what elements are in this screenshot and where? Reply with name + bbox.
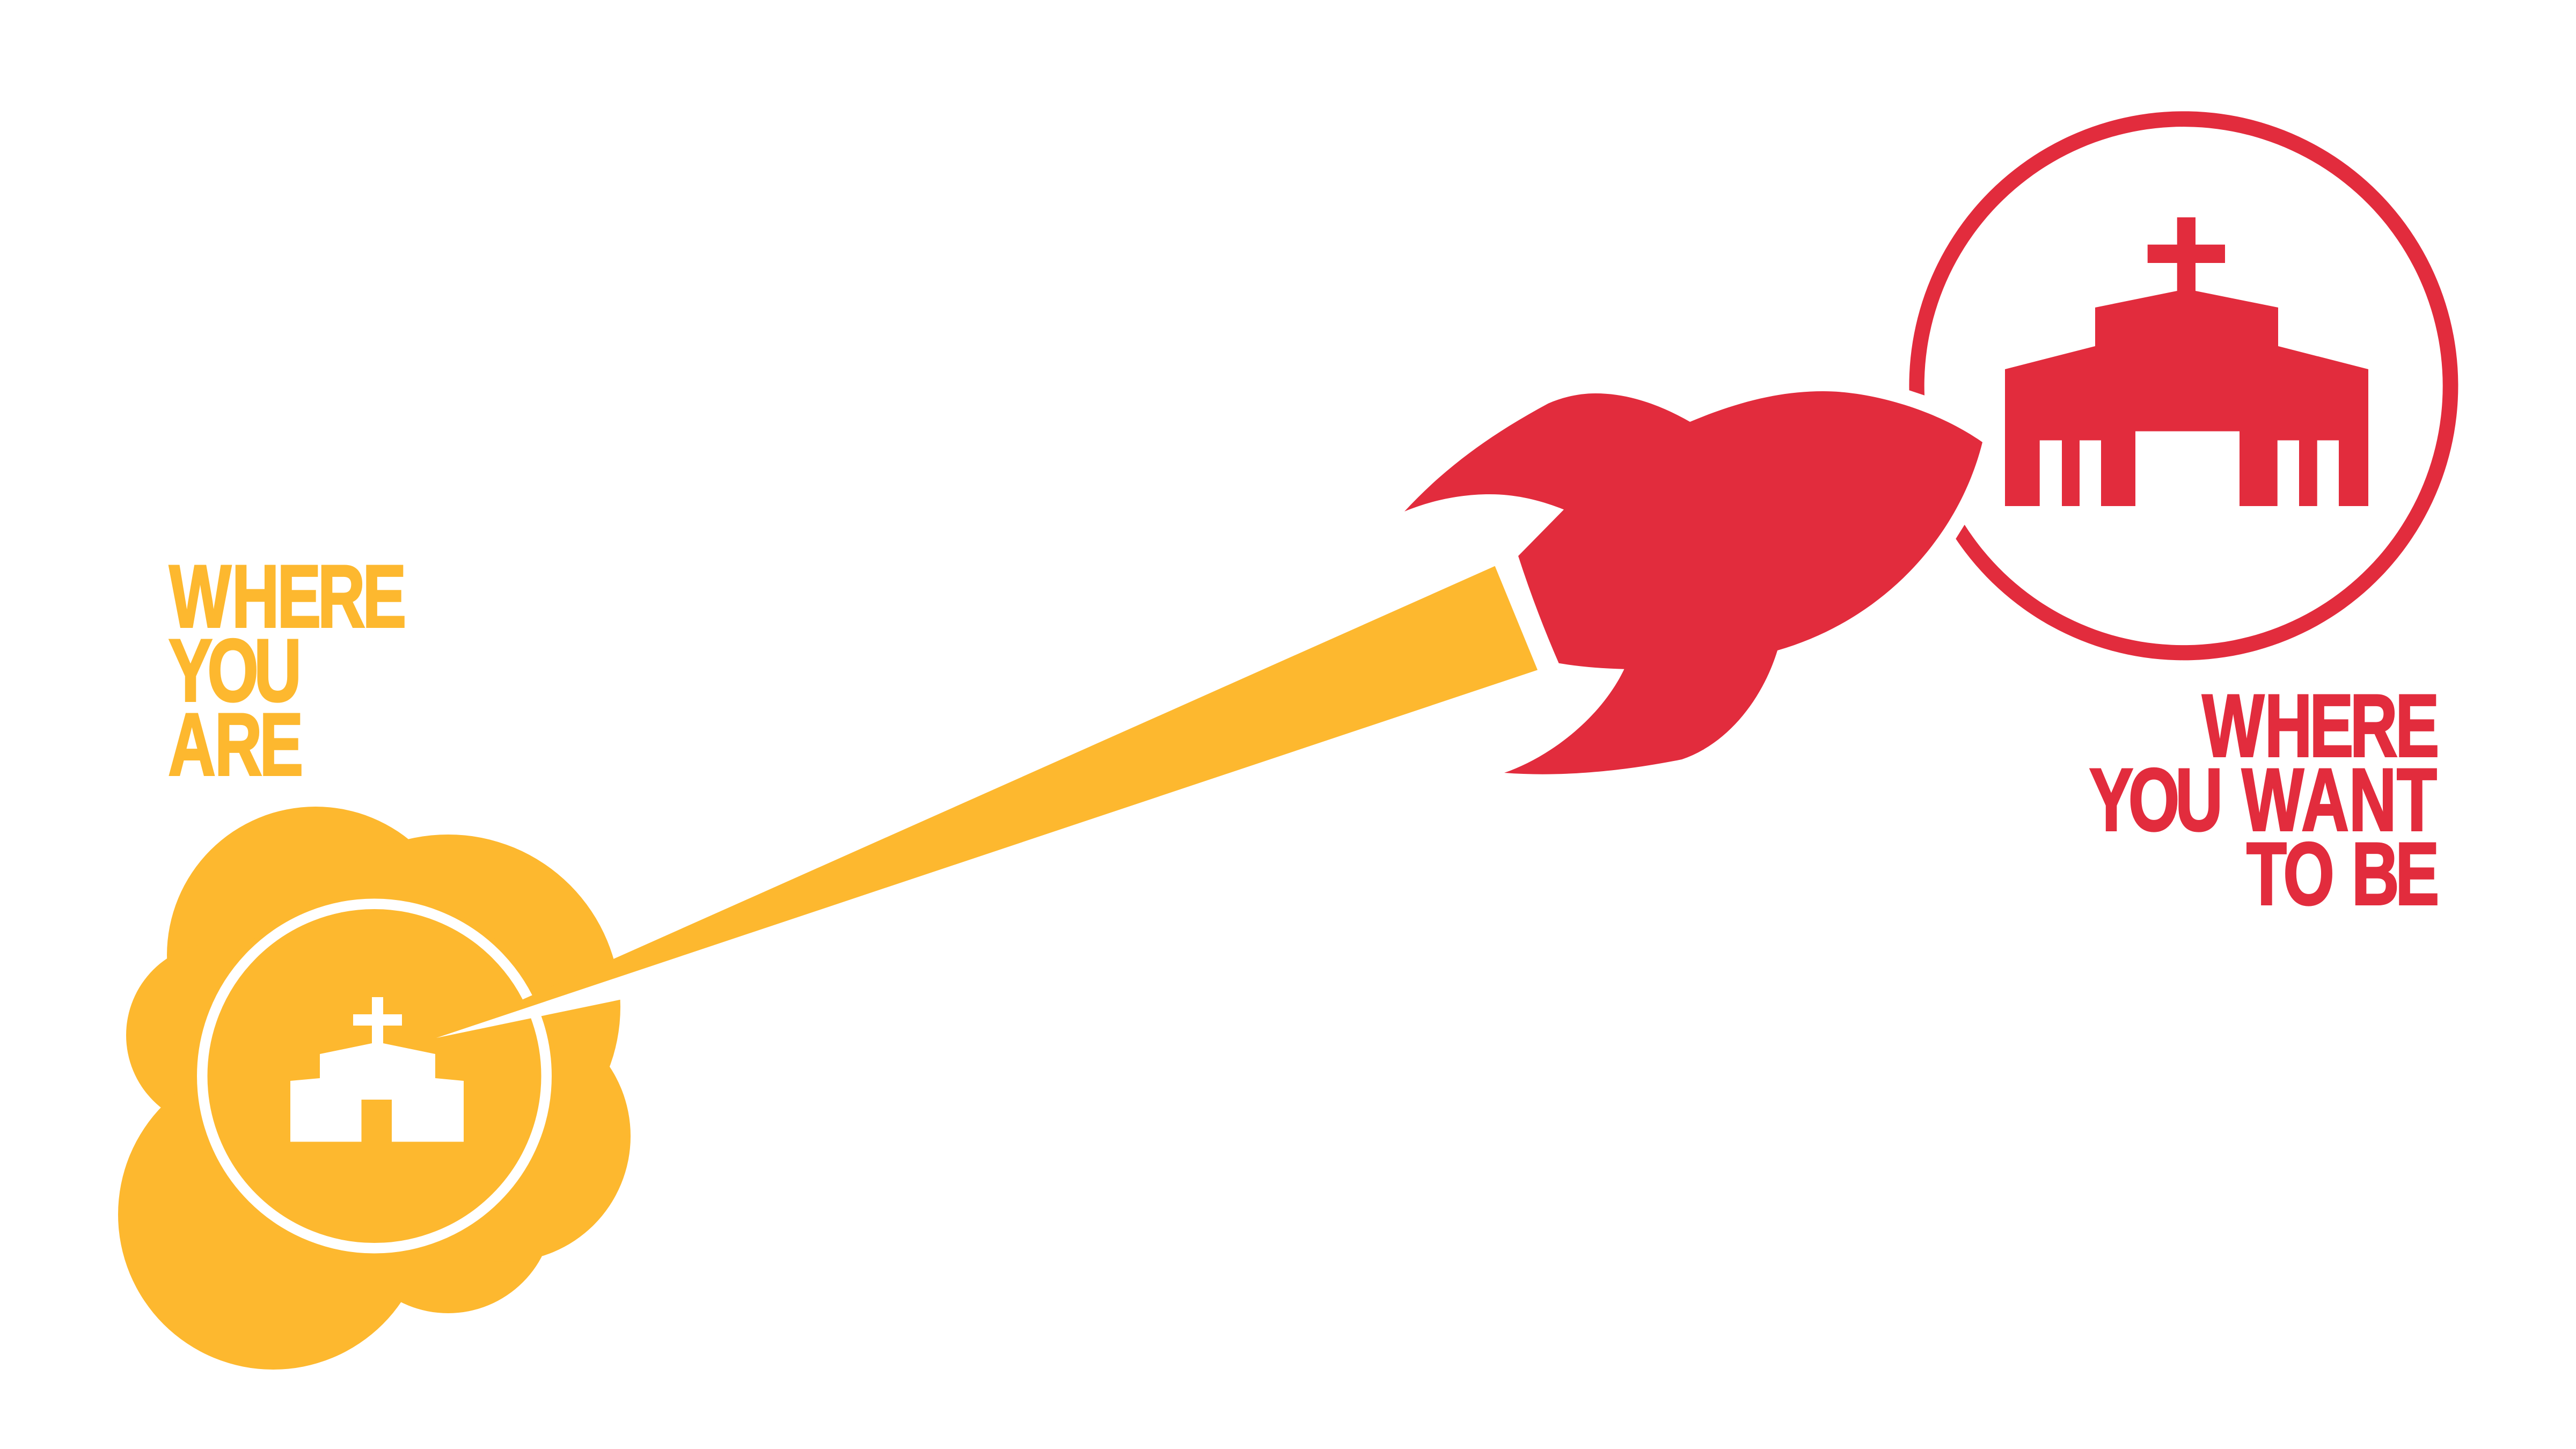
heading: where you want to be: WHERE xyxy=(2202,676,2439,775)
heading: where you are: ARE xyxy=(168,695,303,794)
heading: where you want to be: TO BE xyxy=(2246,824,2439,923)
heading: where you want to be xyxy=(2089,676,2439,923)
heading: where you are: YOU xyxy=(169,621,302,720)
heading: where you want to be: YOU WANT xyxy=(2089,750,2437,849)
icon: red ring around destination church xyxy=(1909,111,2458,660)
icon: red destination church xyxy=(2005,217,2368,506)
heading: where you are xyxy=(168,547,406,794)
heading: where you are: WHERE xyxy=(169,547,406,646)
icon: yellow cloud with church in a circle xyxy=(118,807,631,1370)
church icon: white xyxy=(290,997,464,1142)
icon: red rocket xyxy=(1404,391,1982,774)
white gap under the trail xyxy=(436,955,655,1038)
white ring around current church xyxy=(202,904,546,1248)
cloud shape xyxy=(118,807,631,1370)
arrow: yellow rocket exhaust trail xyxy=(436,566,1538,1038)
